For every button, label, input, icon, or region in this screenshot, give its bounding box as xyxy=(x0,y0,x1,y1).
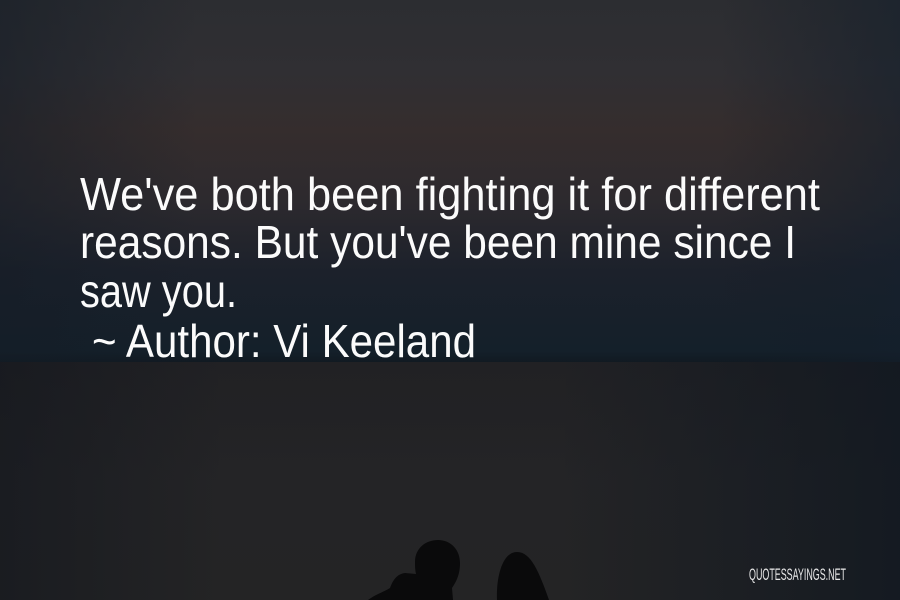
background: sea edge shading xyxy=(0,362,900,600)
silhouette: two people xyxy=(368,540,549,600)
author attribution: ~ Author: Vi Keeland xyxy=(92,315,476,367)
quote text xyxy=(80,168,820,317)
quote line 2: reasons. But you've been mine since I xyxy=(80,216,796,268)
quote line 3: saw you. xyxy=(80,265,237,317)
background: sky edge shading xyxy=(0,0,900,362)
quote line 1: We've both been fighting it for different xyxy=(80,168,820,220)
background: dusk sky xyxy=(0,0,900,362)
background: dark sea xyxy=(0,362,900,600)
